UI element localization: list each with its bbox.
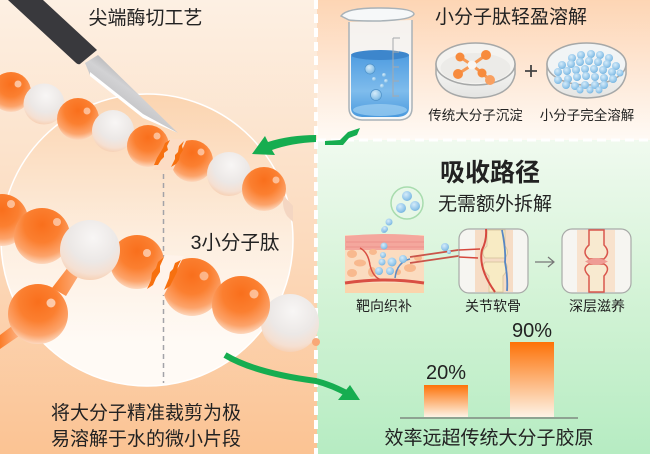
- bar: 90%: [510, 342, 554, 417]
- label: targeted repair: 靶向织补: [356, 298, 412, 314]
- panel: absorption background: [317, 140, 650, 454]
- icon: beaker: [341, 8, 414, 120]
- lower peptide chain right: [144, 255, 320, 352]
- lower peptide chain left: [0, 194, 164, 349]
- text block: cutting description: 易溶解于水的微小片段: [51, 428, 241, 450]
- panel: dissolving background: [317, 0, 650, 140]
- top peptide chain: [0, 72, 293, 222]
- value: 90%: 90%: [512, 320, 552, 342]
- label: joint cartilage: 关节软骨: [465, 298, 521, 314]
- magnified circle: [1, 94, 293, 386]
- arrow: gray to nourished joint: [535, 257, 554, 267]
- caption: efficiency: 效率远超传统大分子胶原: [384, 427, 594, 449]
- heading: absorption path: 吸收路径: [440, 159, 540, 187]
- icon: skin tissue: [345, 226, 465, 293]
- icon: joint cartilage: [459, 229, 528, 293]
- heading: dissolving: 小分子肽轻盈溶解: [435, 6, 587, 28]
- bar chart: [400, 320, 578, 418]
- icon: dish with sediment: [436, 43, 515, 98]
- icon: dish with dissolved beads: [547, 43, 626, 98]
- arrow: green upper: [252, 128, 360, 155]
- arrow: green lower: [225, 355, 360, 400]
- text block: cutting description: [51, 402, 241, 450]
- axis: [400, 417, 578, 419]
- subheading: no extra breakdown: 无需额外拆解: [438, 193, 552, 215]
- panel: enzyme cutting background: [0, 0, 317, 454]
- label: 3 small peptide: 3小分子肽: [191, 232, 279, 254]
- label: deep nourishment: 深层滋养: [569, 298, 625, 314]
- icon: nourished joint: [562, 229, 631, 293]
- label: dissolved dish: 小分子完全溶解: [540, 107, 634, 123]
- text block: cutting description: 将大分子精准裁剪为极: [51, 402, 241, 424]
- icon: scalpel knife: [8, 0, 178, 133]
- plus sign: [525, 65, 537, 77]
- heading: enzyme cutting: 尖端酶切工艺: [88, 7, 203, 29]
- bar: 20%: [424, 385, 468, 417]
- value: 20%: 20%: [426, 362, 466, 384]
- icon: molecule bubble: [381, 187, 423, 233]
- label: sediment dish: 传统大分子沉淀: [428, 108, 523, 123]
